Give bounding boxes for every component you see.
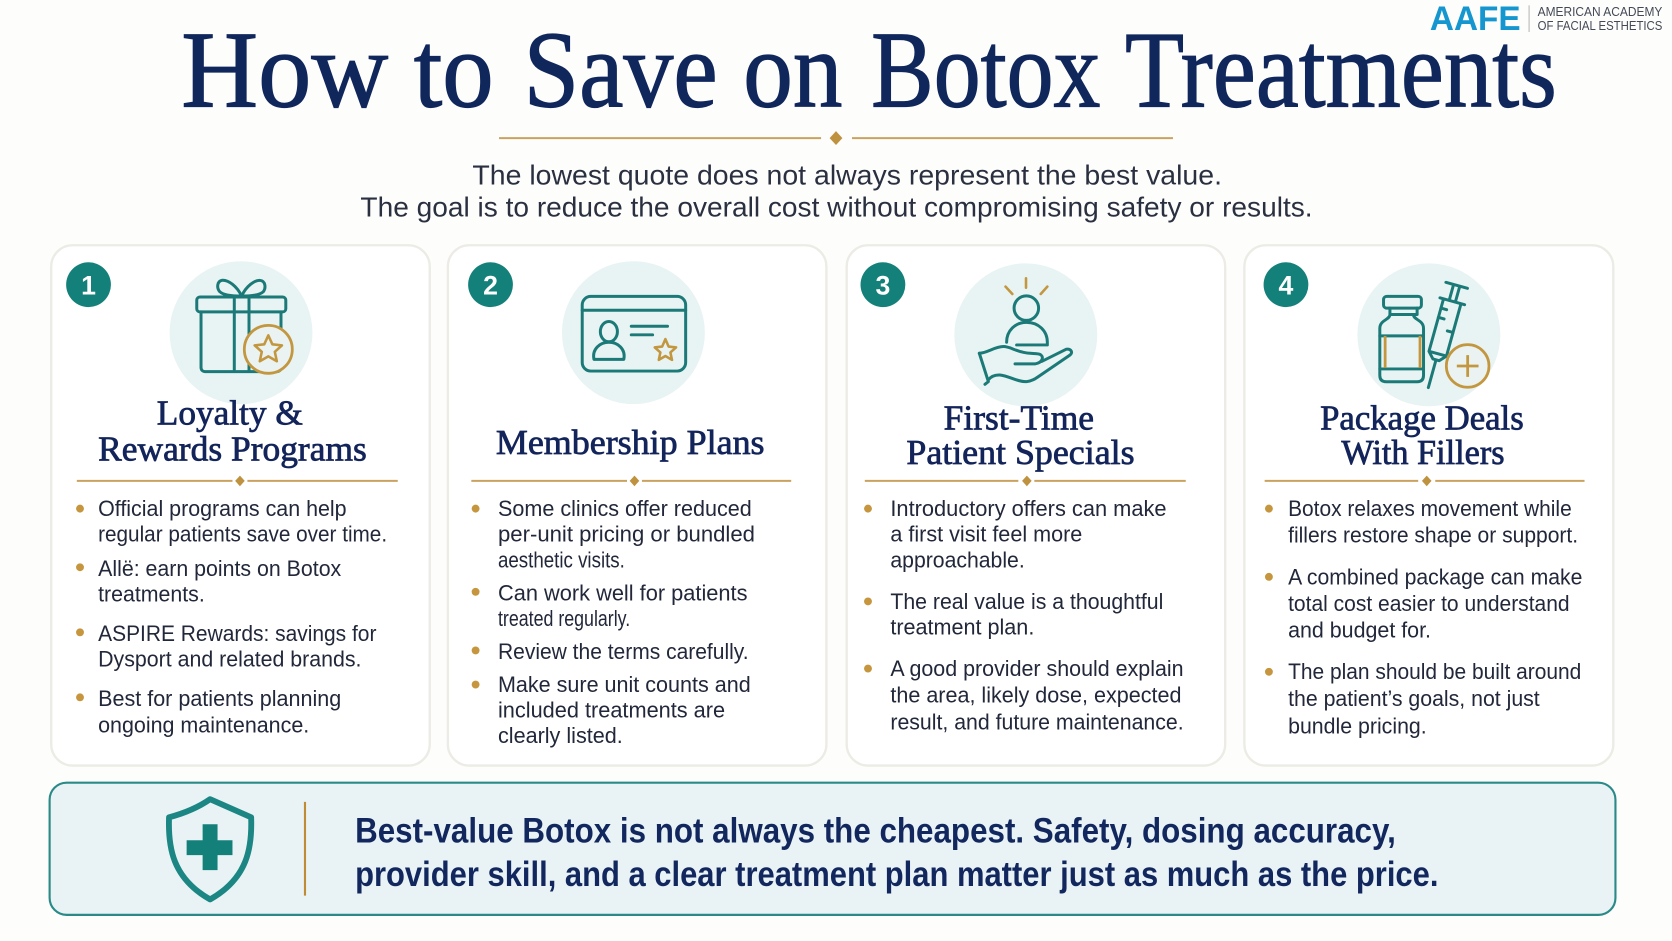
bullet list: Some clinics offer reduced: [498, 496, 752, 521]
number badge 3: 3: [876, 270, 890, 300]
bullet list: result, and future maintenance.: [890, 709, 1184, 734]
bullet list: aesthetic visits.: [498, 547, 625, 572]
callout banner: [50, 783, 1615, 915]
callout text: Best-value Botox is not always the cheapest. Safety, dosing accuracy,: [355, 811, 1396, 850]
bullet list: ongoing maintenance.: [98, 713, 309, 738]
subtitle: [360, 159, 1313, 222]
panel: first-time patient specials: [847, 245, 1225, 766]
number badge 4: [1264, 262, 1308, 307]
bullet list: Introductory offers can make: [890, 496, 1167, 521]
bullet list: ASPIRE Rewards: savings for: [98, 621, 377, 646]
panel: package deals with fillers: [1244, 245, 1613, 766]
bullet list: included treatments are: [498, 698, 725, 723]
bullet list: Make sure unit counts and: [498, 672, 751, 697]
bullet list: Best for patients planning: [98, 686, 341, 711]
bullet list: treated regularly.: [498, 606, 630, 631]
panel: membership plans: [448, 245, 826, 766]
bullet list: approachable.: [890, 547, 1025, 572]
callout text: provider skill, and a clear treatment plan matter just as much as the price.: [355, 855, 1438, 894]
bullet list: The plan should be built around: [1288, 659, 1581, 684]
icon: person above open hand: [954, 263, 1097, 406]
title: Save: [524, 10, 718, 131]
bullet list: Can work well for patients: [498, 580, 747, 605]
number badge 2: [468, 262, 513, 307]
heading: Patient Specials: [906, 433, 1135, 472]
bullet list: Dysport and related brands.: [98, 646, 362, 671]
bullet list: clearly listed.: [498, 723, 623, 748]
bullet list: [864, 496, 1184, 734]
icon: gift with star badge: [170, 261, 312, 404]
title: How: [181, 10, 389, 131]
logo: AAFE: [1430, 0, 1663, 38]
bullet list: total cost easier to understand: [1288, 591, 1570, 616]
bullet list: treatments.: [98, 581, 205, 606]
bullet list: bundle pricing.: [1288, 714, 1427, 739]
bullet list: the patient’s goals, not just: [1288, 686, 1540, 711]
number badge 2: 2: [483, 270, 498, 300]
heading: Loyalty &: [157, 393, 303, 432]
bullet list: fillers restore shape or support.: [1288, 523, 1578, 548]
icon: membership card: [562, 261, 705, 404]
bullet list: treatment plan.: [890, 614, 1034, 639]
bullet list: a first visit feel more: [890, 522, 1082, 547]
bullet list: and budget for.: [1288, 618, 1431, 643]
title: to: [414, 10, 494, 131]
bullet list: [76, 496, 387, 738]
bullet list: Allë: earn points on Botox: [98, 556, 341, 581]
logo: AAFE: AAFE: [1430, 0, 1521, 38]
bullet list: A combined package can make: [1288, 564, 1582, 589]
subtitle: The goal is to reduce the overall cost without compromising safety or results.: [360, 191, 1313, 222]
bullet list: the area, likely dose, expected: [890, 683, 1181, 708]
bullet list: regular patients save over time.: [98, 522, 387, 547]
number badge 1: [66, 262, 111, 307]
heading: First-Time: [944, 399, 1094, 438]
bullet list: A good provider should explain: [890, 656, 1184, 681]
heading: Package Deals: [1320, 399, 1524, 438]
panel: loyalty and rewards programs: [51, 245, 430, 766]
logo: AAFE: AMERICAN ACADEMY: [1538, 4, 1663, 19]
icon: medical shield: [169, 799, 251, 899]
callout text: [355, 811, 1438, 894]
title: [181, 10, 1557, 131]
icon: vial, syringe and plus: [1357, 263, 1500, 406]
number badge 4: 4: [1279, 270, 1294, 300]
title: on: [743, 10, 842, 131]
heading: [906, 399, 1135, 472]
heading: Membership Plans: [496, 423, 765, 462]
bullet list: [472, 496, 755, 748]
bullet list: per-unit pricing or bundled: [498, 522, 755, 547]
bullet list: [1265, 496, 1582, 739]
number badge 1: 1: [81, 270, 96, 300]
title: Treatments: [1125, 10, 1557, 131]
subtitle: The lowest quote does not always represent the best value.: [472, 159, 1222, 190]
heading: With Fillers: [1341, 433, 1505, 472]
bullet list: Official programs can help: [98, 496, 347, 521]
heading: [98, 393, 367, 469]
heading: [1320, 399, 1524, 472]
bullet list: The real value is a thoughtful: [890, 589, 1163, 614]
title divider: [499, 131, 1173, 145]
heading: Rewards Programs: [98, 430, 367, 469]
number badge 3: [861, 262, 905, 307]
title: Botox: [871, 10, 1100, 131]
bullet list: Botox relaxes movement while: [1288, 496, 1572, 521]
bullet list: Review the terms carefully.: [498, 639, 749, 664]
